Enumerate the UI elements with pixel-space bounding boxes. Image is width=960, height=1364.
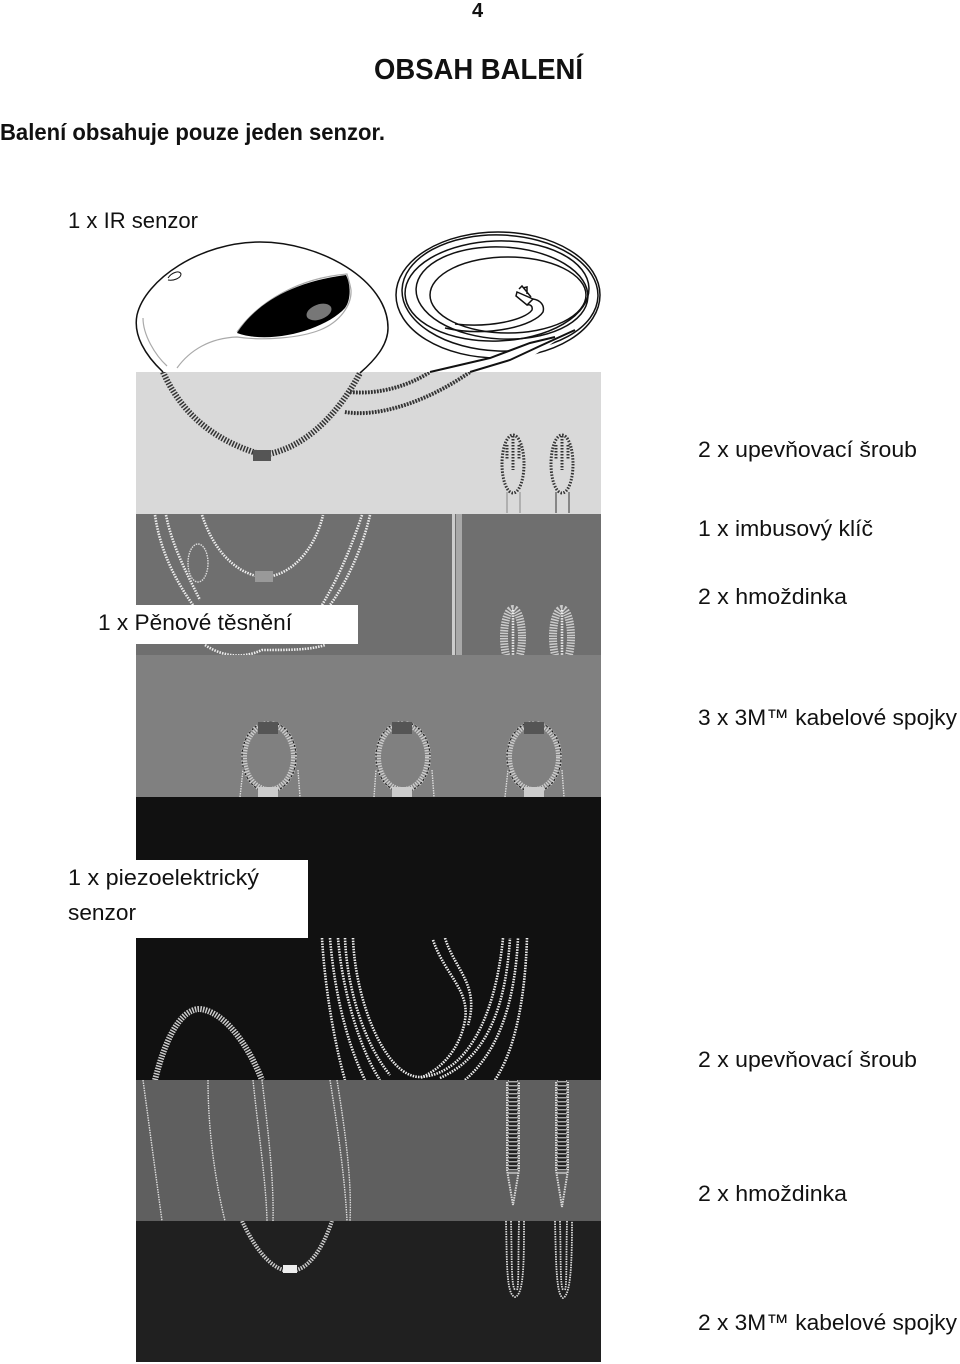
label: wall plugs second set: 2 x hmoždinka: [698, 1181, 847, 1206]
icon: IR sensor dome: [136, 242, 388, 373]
intro note: Balení obsahuje pouze jeden senzor.: [0, 119, 385, 145]
label: mounting screws: 2 x upevňovací šroub: [698, 437, 917, 462]
panel: dark gray band: [136, 1080, 601, 1221]
callout: foam seal: 1 x Pěnové těsnění: [98, 610, 293, 635]
panel: light gray band: [136, 372, 601, 514]
label: cable ties second set: 2 x 3M™ kabelové spojky: [698, 1310, 958, 1335]
panel: gray band: [136, 655, 601, 797]
label: hex key: 1 x imbusový klíč: [698, 516, 873, 541]
label: mounting screws second set: 2 x upevňovací šroub: [698, 1047, 917, 1072]
panel: black band: [136, 797, 601, 1080]
drawing fragments: charcoal band: [242, 1221, 572, 1298]
callout: piezoelectric sensor: 1 x piezoelektrický: [68, 865, 260, 890]
label: wall plugs: 2 x hmoždinka: [698, 584, 847, 609]
panel: charcoal band: [136, 1221, 601, 1362]
panel: mid gray band: [136, 514, 601, 655]
label: cable ties: 3 x 3M™ kabelové spojky: [698, 705, 958, 730]
page number: 4: [472, 0, 484, 22]
callout: piezoelectric sensor: senzor: [68, 900, 136, 925]
callout: piezoelectric sensor: [68, 860, 308, 938]
drawing fragments: light gray band: [163, 372, 573, 513]
title: OBSAH BALENÍ: [374, 52, 584, 86]
drawing fragments: mid gray band: [155, 514, 571, 665]
drawing fragments: cable ties: [240, 722, 564, 797]
label: IR sensor: 1 x IR senzor: [68, 208, 198, 233]
icon: coiled cable: [396, 232, 600, 372]
drawing fragments: black band: [155, 938, 527, 1080]
drawing fragments: dark gray band: [143, 1080, 568, 1221]
callout: foam seal: [98, 605, 358, 644]
